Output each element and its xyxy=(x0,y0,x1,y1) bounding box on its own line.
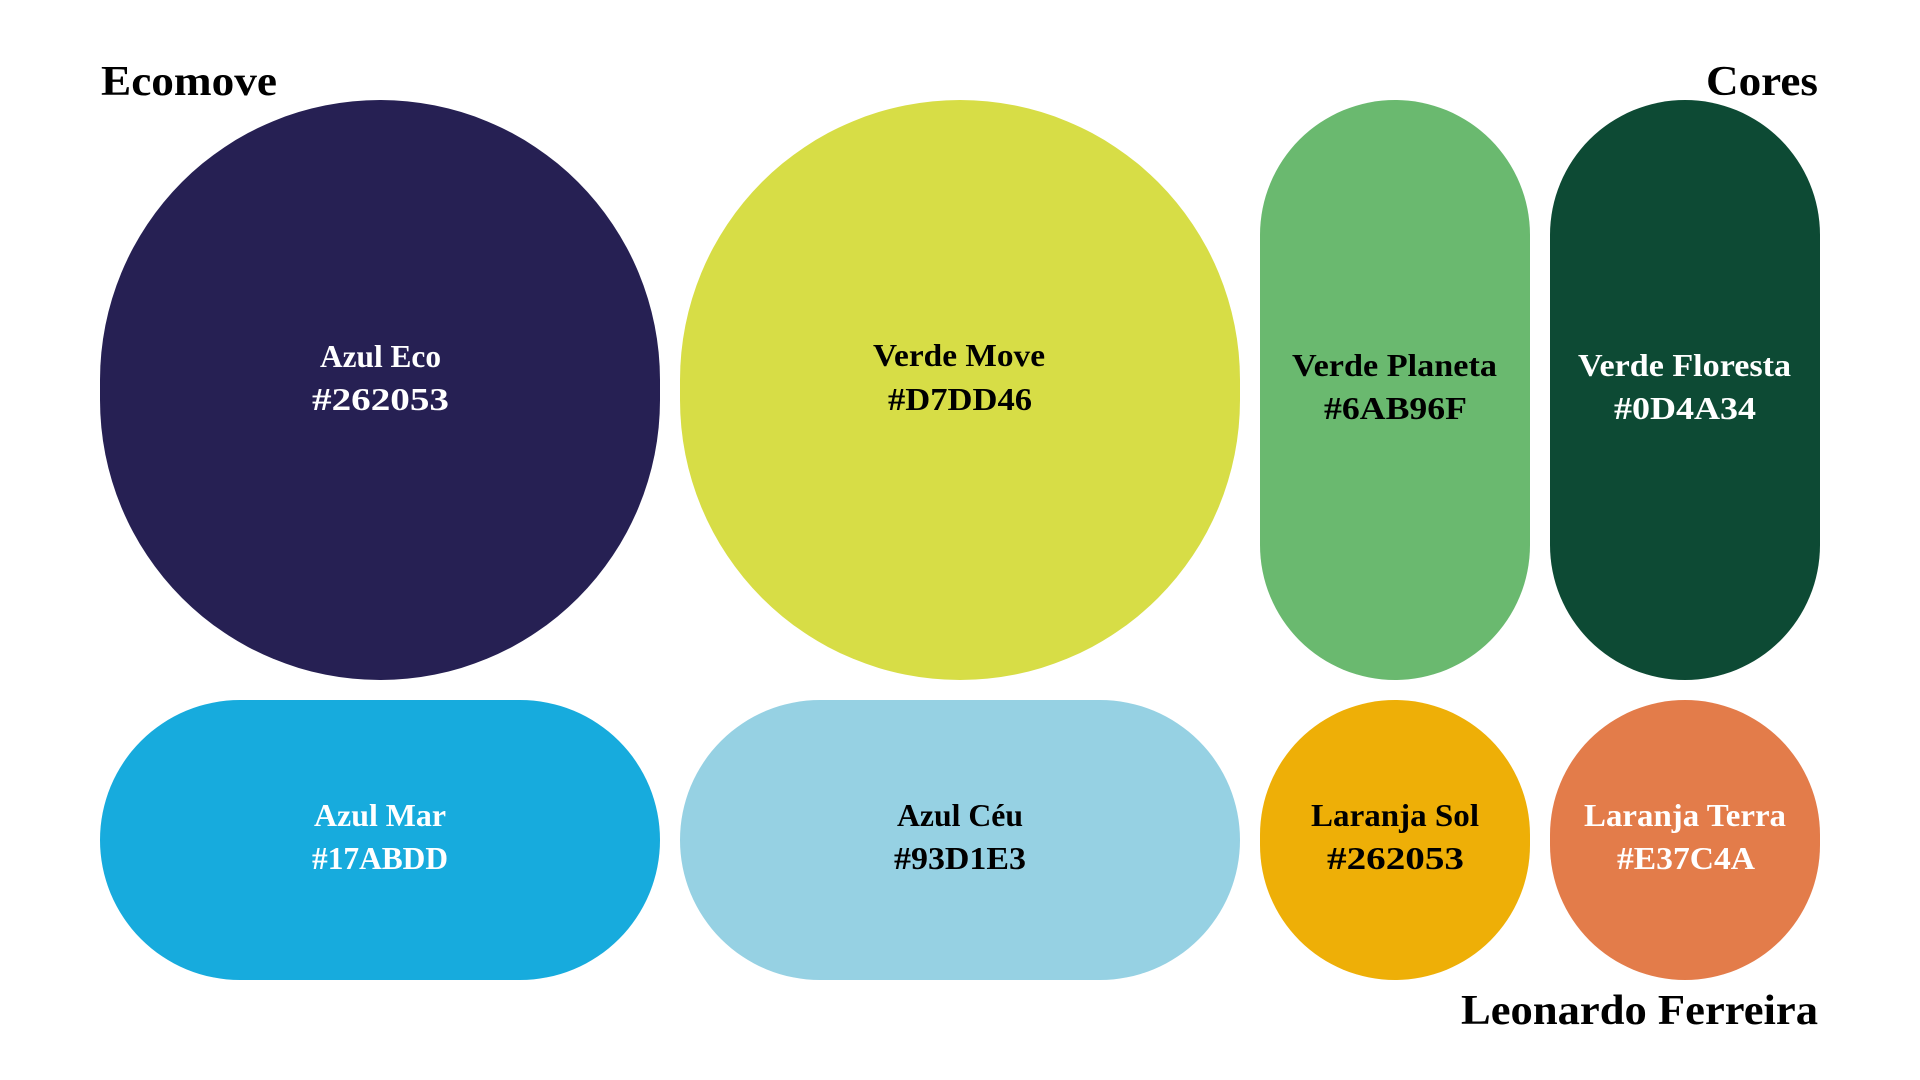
label: Azul Céu hex: #93D1E3 xyxy=(894,840,1026,876)
panel: Azul Céu xyxy=(680,700,1240,980)
author credit: Leonardo Ferreira: Leonardo Ferreira xyxy=(1461,988,1818,1034)
panel: Azul Eco xyxy=(100,100,660,680)
label: Azul Eco name: Azul Eco xyxy=(320,338,441,374)
heading: Cores: Cores xyxy=(1706,59,1818,105)
panel: Laranja Terra xyxy=(1550,700,1820,980)
label: Verde Move hex: #D7DD46 xyxy=(888,381,1032,417)
label: Verde Floresta name: Verde Floresta xyxy=(1578,347,1791,383)
panel: Azul Mar xyxy=(100,700,660,980)
label: Verde Move name: Verde Move xyxy=(873,337,1045,373)
panel: Laranja Sol xyxy=(1260,700,1530,980)
label: Laranja Sol hex: #262053 xyxy=(1327,840,1464,876)
panel: Verde Floresta xyxy=(1550,100,1820,680)
label: Laranja Terra hex: #E37C4A xyxy=(1617,840,1755,876)
label: Laranja Terra name: Laranja Terra xyxy=(1584,797,1786,833)
label: Verde Planeta name: Verde Planeta xyxy=(1292,347,1497,383)
title: Ecomove: Ecomove xyxy=(101,59,277,105)
label: Azul Eco hex: #262053 xyxy=(312,381,449,417)
panel: Verde Move xyxy=(680,100,1240,680)
label: Azul Mar name: Azul Mar xyxy=(314,797,446,833)
panel: Verde Planeta xyxy=(1260,100,1530,680)
label: Verde Floresta hex: #0D4A34 xyxy=(1614,390,1756,426)
label: Azul Céu name: Azul Céu xyxy=(897,797,1023,833)
label: Laranja Sol name: Laranja Sol xyxy=(1311,797,1479,833)
label: Azul Mar hex: #17ABDD xyxy=(312,840,448,876)
label: Verde Planeta hex: #6AB96F xyxy=(1324,390,1467,426)
